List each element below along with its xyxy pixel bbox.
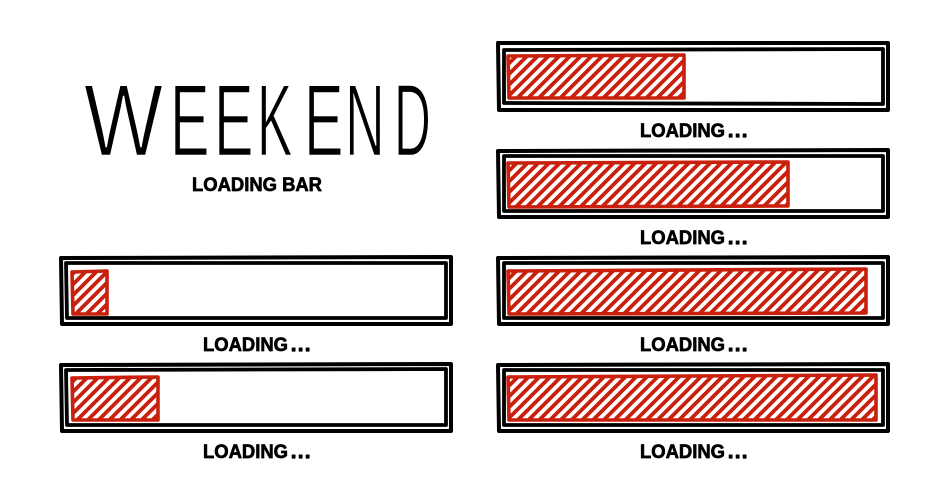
loading bar: third right, about 95 percent: ... xyxy=(728,335,747,356)
title: WEEKEND: E xyxy=(214,64,253,178)
loading bar: bottom right, almost full xyxy=(498,364,888,463)
subtitle: loading bar: LOADING BAR xyxy=(192,175,322,196)
loading bar: top right, about 45 percent: ... xyxy=(728,121,747,142)
loading bar: third right, about 95 percent xyxy=(498,257,888,356)
loading bar: lower left, about 25 percent xyxy=(61,364,451,463)
loading bar: top right, about 45 percent xyxy=(498,43,888,142)
title: WEEKEND: N xyxy=(345,65,385,178)
loading bar: bottom right, almost full: LOADING xyxy=(640,442,725,463)
title: WEEKEND: D xyxy=(394,64,431,178)
loading bar: upper left, about 10 percent xyxy=(61,257,451,356)
title: WEEKEND: E xyxy=(170,64,209,178)
loading bar: second right, about 75 percent xyxy=(498,150,888,249)
title: WEEKEND: E xyxy=(304,64,343,178)
loading bar: upper left, about 10 percent: ... xyxy=(291,335,310,356)
loading bar: top right, about 45 percent: LOADING xyxy=(640,121,725,142)
loading bar: lower left, about 25 percent: LOADING xyxy=(203,442,288,463)
loading bar: bottom right, almost full: ... xyxy=(728,442,747,463)
loading bar: second right, about 75 percent: ... xyxy=(728,228,747,249)
loading bar: second right, about 75 percent: LOADING xyxy=(640,228,725,249)
loading bar: third right, about 95 percent: LOADING xyxy=(640,335,725,356)
title: WEEKEND: K xyxy=(257,64,292,178)
title: WEEKEND xyxy=(84,64,431,178)
loading bar: upper left, about 10 percent: LOADING xyxy=(203,335,288,356)
loading bar: lower left, about 25 percent: ... xyxy=(291,442,310,463)
title: WEEKEND: W xyxy=(84,64,163,177)
